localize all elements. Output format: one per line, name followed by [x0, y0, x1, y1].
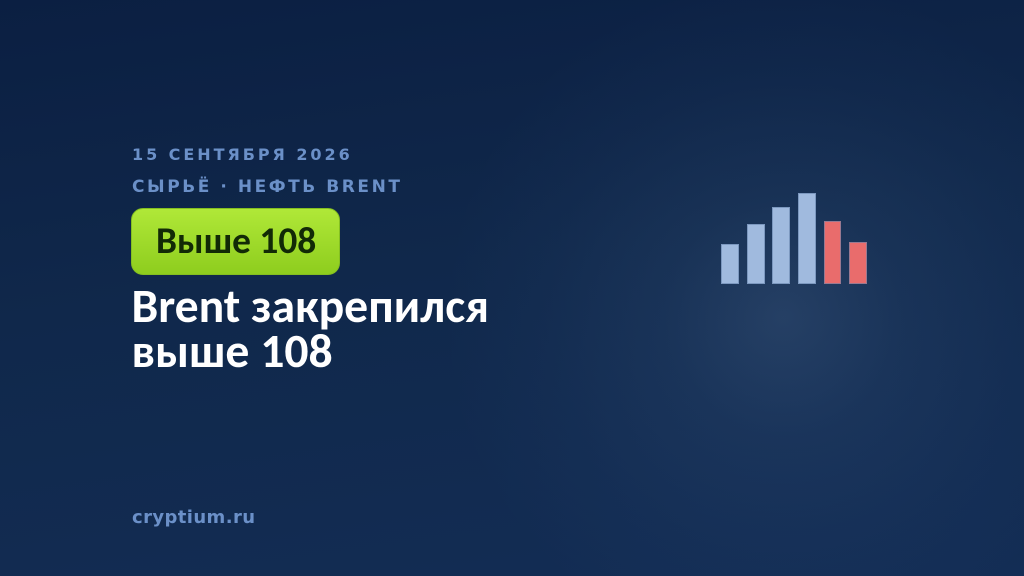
bar 6 — [849, 242, 867, 284]
site footer: cryptium.ru — [132, 507, 255, 528]
bar chart icon — [721, 193, 867, 284]
headline — [132, 277, 489, 380]
bar 1 — [721, 244, 739, 284]
headline: Brent закрепился — [132, 277, 489, 335]
bar 3 — [772, 207, 790, 284]
bar 2 — [747, 224, 765, 284]
category line: СЫРЬЁ · НЕФТЬ BRENT — [132, 177, 403, 197]
headline: выше 108 — [132, 322, 333, 380]
badge label: Выше 108 — [156, 218, 316, 264]
date line: 15 СЕНТЯБРЯ 2026 — [132, 145, 353, 164]
bar 4 — [798, 193, 816, 284]
bar 5 — [824, 221, 841, 284]
badge — [131, 208, 340, 275]
